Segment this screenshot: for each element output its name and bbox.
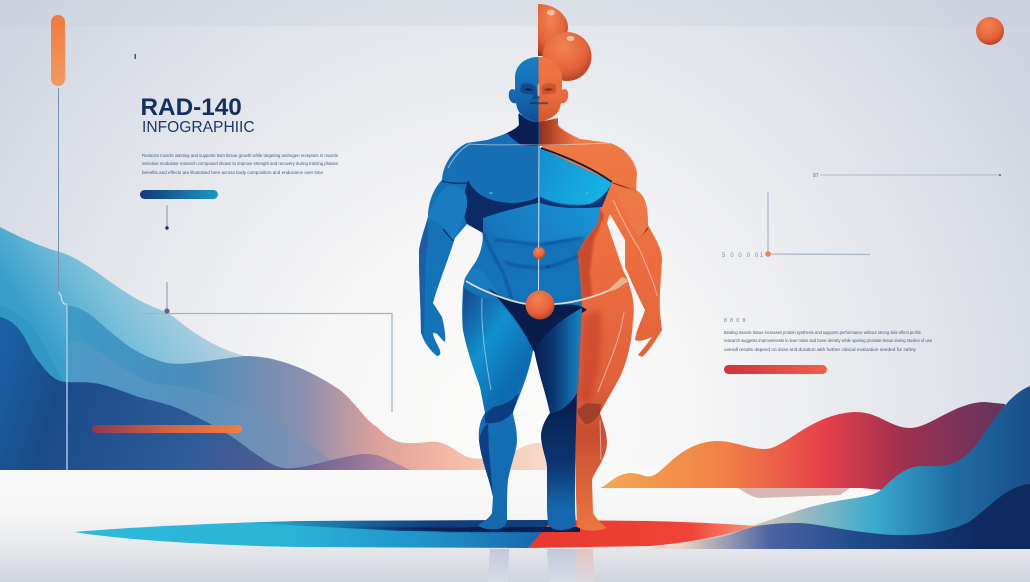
right arm shading — [613, 185, 648, 238]
right wave landscape — [600, 386, 1030, 549]
orange sphere at waist — [526, 290, 554, 320]
left paragraph — [142, 153, 339, 175]
blue body half — [419, 114, 612, 530]
lower connector — [66, 305, 68, 470]
face features — [520, 83, 556, 104]
top right orange sphere — [976, 17, 1004, 45]
right thigh — [534, 308, 582, 413]
neck shadow blue — [507, 113, 538, 146]
orange split spheres above head — [538, 4, 592, 81]
right paragraph: Binding muscle tissue increases protein synthesis and supports performance without strong side effect profile — [724, 330, 921, 335]
left bracket callout — [142, 282, 392, 412]
pec shadow right — [540, 182, 612, 208]
left paragraph: benefits and effects are illustrated here across body composition and endurance over time — [142, 170, 323, 175]
diagonal chest edge — [541, 148, 612, 182]
blue pill — [140, 190, 218, 199]
left knee crease — [485, 392, 519, 423]
connector with dot — [165, 205, 169, 230]
right calf shade — [541, 393, 577, 510]
nipples — [489, 192, 589, 194]
small marker — [134, 54, 136, 59]
left shoulder arm crease — [442, 181, 468, 241]
top band — [0, 0, 1030, 26]
orange flank shading — [578, 207, 604, 300]
left wave landscape — [0, 227, 560, 470]
head orange side — [538, 57, 568, 122]
body highlight lines — [448, 143, 657, 460]
title: RAD-140 — [140, 94, 242, 121]
right elbow callout — [722, 192, 870, 259]
pec shadow left — [464, 180, 538, 233]
neck shade orange — [539, 118, 576, 146]
right paragraph: research suggests improvements in lean mass and bone density while sparing prostate tissue during studies of use — [724, 338, 932, 343]
figure: muscular body split blue and orange — [419, 57, 662, 531]
central seam — [538, 146, 540, 300]
left shin shade — [479, 424, 493, 497]
connector kink — [58, 292, 67, 304]
head blue side — [509, 57, 538, 122]
subtitle: INFOGRAPHIIC — [142, 119, 255, 136]
right paragraph: overall results depend on dose and duration with further clinical evaluation needed for safety — [724, 347, 917, 352]
left paragraph: Reduces muscle wasting and supports lean tissue growth while targeting androgen receptors in muscle — [142, 153, 338, 158]
floor — [0, 470, 1030, 582]
left forearm shade — [419, 217, 428, 335]
orange knee shading — [577, 403, 601, 424]
left vertical connector — [58, 88, 60, 292]
floor mat split blue and red — [74, 520, 757, 548]
abs panels — [483, 202, 600, 246]
crotch shadow — [488, 288, 587, 413]
right paragraph heading: 8 8 0 8 — [724, 318, 746, 324]
left upper arm highlight — [428, 186, 467, 240]
abs shading — [483, 232, 584, 300]
left paragraph: selective modulator research compound shown to improve strength and recovery during training phases — [142, 161, 339, 166]
navel — [546, 266, 550, 268]
chest right highlight — [540, 148, 612, 205]
right paragraph — [724, 330, 932, 352]
orange body half — [539, 120, 662, 531]
waistband tan end — [606, 277, 627, 292]
orange gradient pill — [92, 425, 242, 433]
orange sphere on torso line — [533, 247, 545, 259]
left thigh — [462, 288, 533, 412]
red pill — [724, 365, 827, 374]
hip cover — [465, 267, 500, 296]
orange thigh dark side — [578, 310, 602, 402]
right elbow callout: 5 0 0 0 01 — [722, 253, 765, 259]
top left orange pill — [51, 15, 65, 86]
reflection of the legs — [488, 549, 595, 582]
right arm crease — [613, 183, 648, 237]
waistband — [466, 281, 627, 304]
top right label line: 87 — [813, 173, 819, 179]
